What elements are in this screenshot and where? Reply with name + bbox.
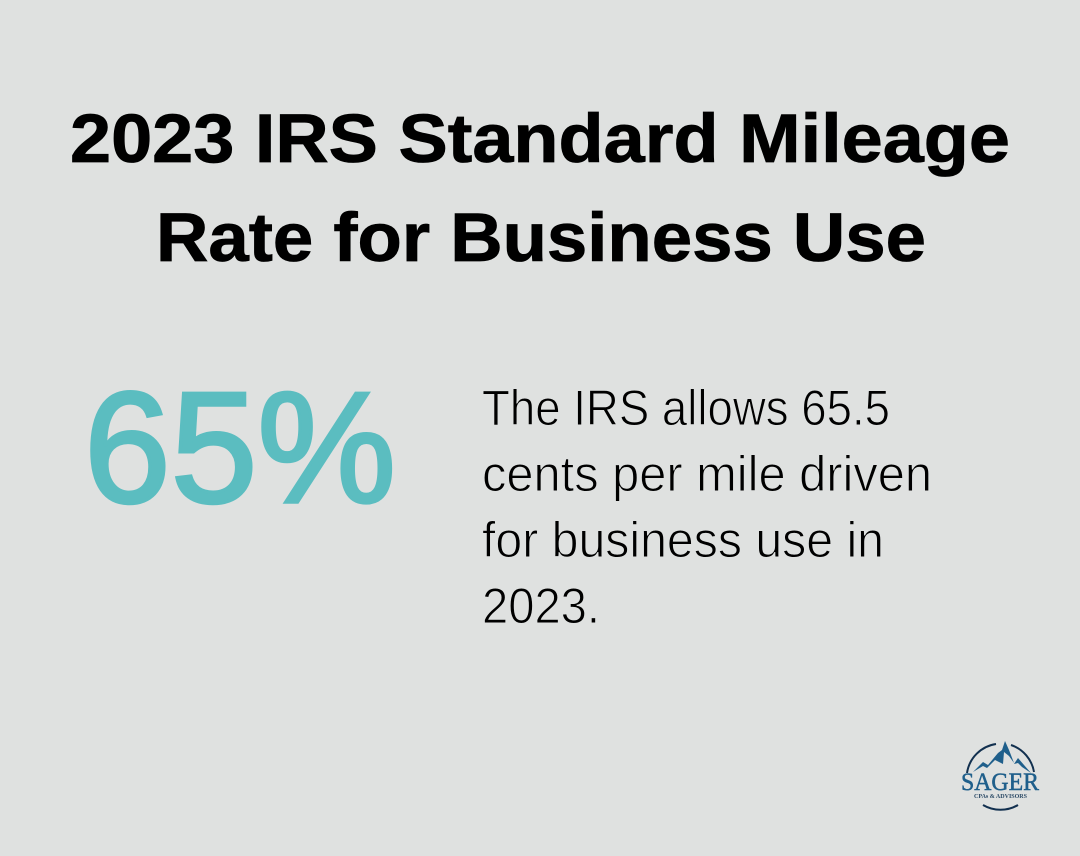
description text: The IRS allows 65.5 xyxy=(482,380,890,436)
title: Rate for Business Use xyxy=(156,199,926,276)
description text: 2023. xyxy=(482,578,600,634)
logo: Sager CPAs & Advisors xyxy=(961,741,1039,810)
big statistic: 65%: 65% xyxy=(84,360,396,536)
logo ring arcs xyxy=(967,744,1034,810)
description text: for business use in xyxy=(482,512,884,568)
logo mountains xyxy=(973,741,1031,773)
logo wordmark: SAGER xyxy=(961,769,1039,796)
title xyxy=(70,100,1010,276)
description text: cents per mile driven xyxy=(482,446,932,502)
logo tagline: CPAs & ADVISORS xyxy=(974,794,1028,800)
title: 2023 IRS Standard Mileage xyxy=(70,100,1010,177)
description text xyxy=(482,380,932,634)
